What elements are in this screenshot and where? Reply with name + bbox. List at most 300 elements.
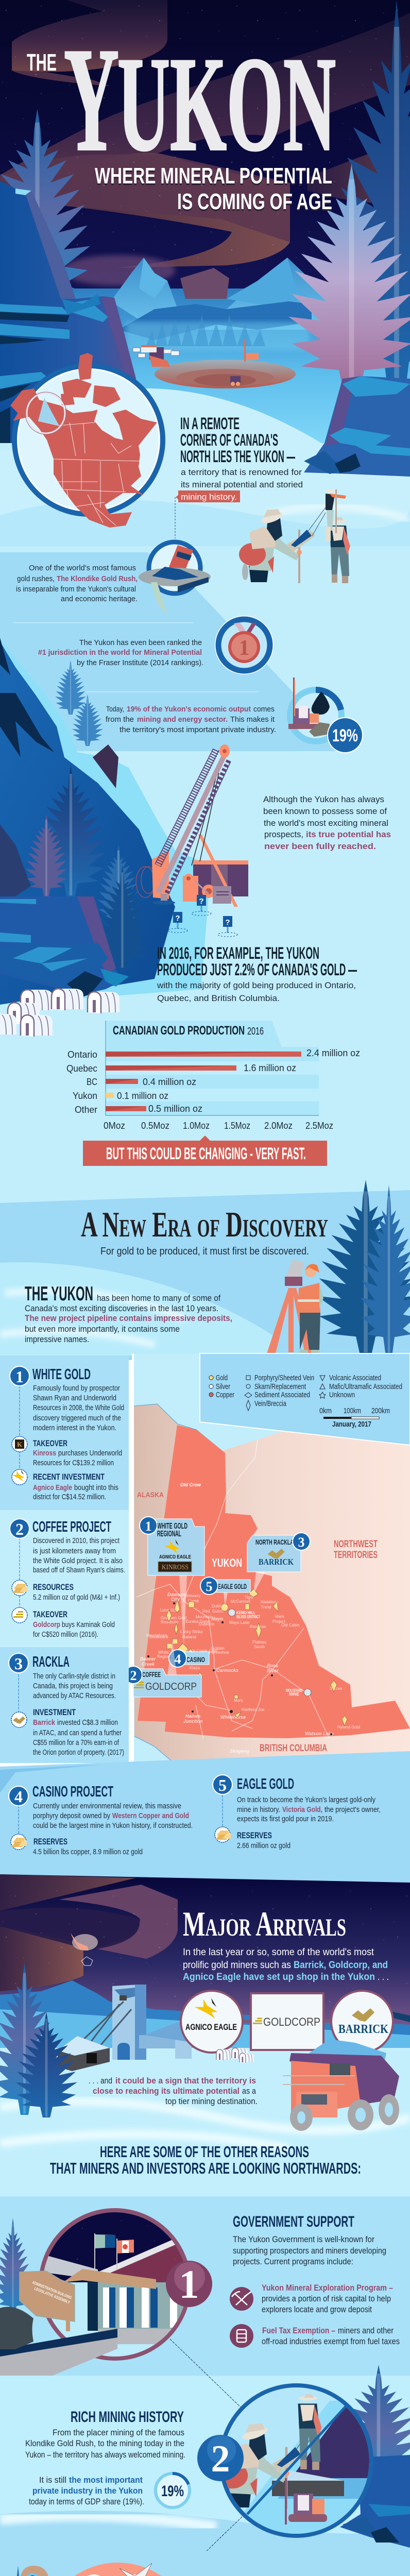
illustration: mining plant: [58, 1985, 216, 2071]
map label: Alaska: ALASKA: [137, 1490, 164, 1499]
panel 3: Rackla: The only Carlin-style district in: [33, 1672, 115, 1681]
callout: Eagle Gold: [200, 1577, 250, 1606]
text: rich mining history: From the placer mining of the famous: [53, 2428, 184, 2437]
text: true potential: [263, 794, 391, 851]
illustration: mining truck: [283, 2039, 399, 2131]
bar chart: Canadian gold production: CANADIAN GOLD PRODUCTION: [113, 1024, 245, 1038]
text: the Yukon intro: impressive names.: [25, 1334, 89, 1344]
panel 1: White Gold: bought into this: [74, 1483, 118, 1492]
rocks, tree and question signs: [0, 866, 237, 997]
map: Yukon discovery map: Dublin: [212, 1604, 224, 1608]
text: the Yukon intro: THE YUKON: [25, 1283, 93, 1305]
map legend panel: Volcanic Associated: [329, 1374, 381, 1382]
map legend panel: Porphyry/Sheeted Vein: [254, 1374, 314, 1382]
Eagle Gold: Victoria Gold,: [282, 1805, 322, 1814]
panel 2: Coffee Project: 2: [15, 1520, 24, 1538]
map: Yukon discovery map: Regional: [157, 1654, 174, 1659]
text: top tier destination: close to reaching its ultimate potential: [93, 2086, 240, 2096]
chart: 19 percent GDP ring: 19%: [161, 2483, 184, 2500]
map: Yukon discovery map: Mayo Lake: [229, 1620, 250, 1625]
map: Yukon discovery map: Tiger: [245, 1595, 254, 1600]
text: Klondike gold rush: and economic heritage.: [61, 595, 138, 603]
panel: diagonal darker band: [0, 552, 350, 751]
map: Yukon discovery map: Mars: [275, 1614, 284, 1619]
text: 19 percent economic output: mining and energy sector.: [137, 715, 228, 724]
bar chart: Canadian gold production: BC: [87, 1077, 97, 1087]
icon: dynamite and gold pan: [139, 541, 211, 616]
text: remote corner of Canada: mining history.: [181, 492, 237, 502]
Eagle Gold: the project's owner,: [324, 1805, 381, 1814]
map: Yukon discovery map: City: [171, 1597, 180, 1602]
map: Yukon discovery map: White: [158, 1650, 169, 1655]
bar chart: Canadian gold production: 2016: [247, 1026, 264, 1037]
map: Yukon discovery map: South: [254, 1645, 265, 1649]
map: Yukon discovery map: Carmacks: [216, 1668, 238, 1673]
map: Yukon discovery map: Gulch: [212, 1609, 223, 1614]
callout: Casino: [168, 1649, 209, 1668]
text: rich mining history: Yukon – the territory has always welcomed mining.: [25, 2450, 185, 2460]
text: remote corner of Canada: IN A REMOTE: [180, 414, 240, 433]
panel 1: White Gold: Kinross: [33, 1449, 56, 1458]
panel 1: White Gold: [0, 1355, 129, 1510]
callout: White Gold Regional: REGIONAL: [157, 1530, 181, 1538]
callout: North Rackla: NORTH RACKLA: [255, 1538, 294, 1546]
logos: major miners: [181, 1991, 393, 2053]
sign: administration building: [20, 2271, 75, 2331]
bar chart: Canadian gold production: 0.5Moz: [141, 1121, 169, 1131]
panel 3: Rackla: invested C$8.3 million: [57, 1718, 118, 1727]
panel 2: Coffee Project: Goldcorp: [33, 1620, 60, 1629]
map: Yukon discovery map: Haines: [185, 1714, 201, 1719]
title: The Yukon: THE: [27, 49, 57, 76]
text: 19 percent economic output: 19% of the Yukon's economic output: [127, 705, 251, 714]
tree: left hero spruce: [0, 109, 90, 289]
panel 3: Rackla: INVESTMENT: [33, 1707, 76, 1717]
left cliff rocks: [0, 181, 136, 453]
open pit mine with machines: [133, 340, 296, 388]
camp huts: [0, 989, 119, 1037]
panel 3: Rackla: Canada, this project is being: [33, 1682, 113, 1690]
map: Yukon discovery map: McConnell: [231, 1599, 250, 1604]
dashed connector: [175, 497, 292, 693]
panel 3: Rackla: Barrick: [33, 1718, 56, 1727]
trees: behind surveyor: [317, 1180, 410, 1354]
map: Yukon discovery map: Mountain: [196, 1615, 213, 1619]
text: top tier destination: it could be a sign that the territory is: [115, 2076, 256, 2086]
right cliff rocks: [304, 376, 410, 477]
program: Fuel Tax Exemption: Fuel Tax Exemption –: [262, 2326, 335, 2335]
map: Yukon discovery map: Old Cabin: [281, 1623, 300, 1628]
bar chart: Canadian gold production: 1.0Moz: [183, 1121, 210, 1131]
text: 2016 gold production: with the majority of gold being produced in Ontario,: [157, 980, 356, 990]
map legend panel: Vein/Breccia: [254, 1399, 286, 1408]
panel 1: White Gold: Agnico Eagle: [33, 1483, 72, 1492]
text: true potential: its true potential has: [306, 829, 391, 839]
illustration: mining history circle: [221, 2383, 373, 2538]
map: Yukon discovery map: Mayo: [211, 1616, 224, 1621]
map: Yukon discovery map: Moosehorn: [146, 1633, 167, 1638]
text: miners have set up shop: prolific gold miners such as: [183, 1960, 291, 1971]
subtitle: [95, 163, 332, 214]
panel 1: White Gold: modern interest in the Yukon.: [33, 1423, 116, 1432]
panel 1: White Gold: Resources in 2008, the White Gold: [33, 1403, 124, 1412]
logo: Goldcorp: [251, 1993, 323, 2050]
hero night sky background: [0, 0, 410, 304]
map: Yukon discovery map: Ross: [267, 1663, 278, 1668]
logo: Agnico Eagle: [181, 1991, 243, 2053]
illustration: prospectors: [239, 489, 350, 583]
subtitle: IS COMING OF AGE: [177, 189, 332, 214]
map: Yukon discovery map: KENO HILL: [236, 1611, 255, 1615]
map legend panel: Copper: [216, 1391, 234, 1399]
map: Yukon discovery map: Brewery: [185, 1594, 200, 1598]
bar chart: Canadian gold production: 1.6 million oz: [244, 1063, 296, 1073]
map legend panel: Unknown: [329, 1391, 355, 1399]
text: remote corner of Canada: [176, 414, 303, 502]
text: true potential: never been fully reached.: [264, 841, 376, 851]
panel 2: Coffee Project: based off of Shawn Ryan's claims.: [33, 1566, 125, 1574]
callout: North Rackla: BARRICK: [259, 1557, 294, 1567]
text: Klondike gold rush: The Klondike Gold Rush,: [57, 574, 138, 583]
text: top tier destination: as a: [242, 2086, 256, 2096]
map: Yukon discovery map: Ballarat: [182, 1635, 197, 1639]
callout: White Gold Regional: [139, 1516, 204, 1647]
Eagle Gold: 2.66 million oz gold: [237, 1841, 291, 1850]
text: rich mining history: private industry in the Yukon: [32, 2486, 143, 2496]
map: Yukon discovery map: Hartless Joe: [242, 1707, 265, 1712]
map: Yukon discovery map: Dubloon: [199, 1622, 214, 1626]
text: ranked number one: #1 jurisdiction in the world for Mineral Potential: [38, 648, 202, 657]
illustration: first nations emblems circle: [41, 2563, 195, 2576]
map: Yukon discovery map: Red: [202, 1609, 210, 1614]
panel 1: White Gold: RECENT INVESTMENT: [33, 1472, 105, 1482]
Eagle Gold: RESERVES: [237, 1831, 272, 1840]
program: Yukon Mineral Exploration Program: [230, 2283, 393, 2314]
Casino Project: Currently under environmental review, this massive: [33, 1802, 181, 1810]
panel 2: Coffee Project: TAKEOVER: [33, 1609, 67, 1619]
Eagle Gold: On track to become the Yukon's largest gold-only: [237, 1795, 375, 1804]
callout: Eagle Gold: 5: [206, 1579, 212, 1594]
map: Yukon discovery map: Creek: [142, 1662, 155, 1667]
text: the Yukon intro: but even more importantly, it contains some: [25, 1324, 180, 1334]
panel 3: Rackla: C$55 million for a 70% earn-in of: [33, 1738, 119, 1747]
text: Klondike gold rush: One of the world's most famous: [29, 564, 136, 572]
map label: Yukon: YUKON: [212, 1556, 242, 1569]
icon: medal: 1: [239, 636, 249, 660]
logo: Barrick: [331, 1991, 393, 2053]
Casino Project: 4: [14, 1787, 23, 1806]
panel 2: Coffee Project: for C$520 million (2016).: [33, 1630, 98, 1639]
map legend panel: 200km: [371, 1406, 390, 1415]
callout: White Gold Regional: WHITE GOLD: [157, 1522, 187, 1531]
panel 3: Rackla: the Orion portion of property. (2017): [33, 1748, 124, 1757]
illustration: government building circle: [0, 2208, 191, 2376]
tree: left of first nations: [16, 2566, 20, 2576]
map: Yukon discovery map: Nadaleen: [261, 1600, 278, 1604]
map legend panel: 100km: [344, 1406, 361, 1415]
text: the Yukon intro: [25, 1283, 232, 1344]
text: Klondike gold rush: is inseparable from the Yukon's cultural: [16, 585, 136, 594]
panel 1: White Gold: 1: [15, 1367, 24, 1386]
map label: Northwest Territories: [334, 1539, 378, 1561]
panel 2: Coffee Project: Discovered in 2010, this project: [33, 1536, 120, 1545]
text: ranked number one: by the Fraser Institute (2014 rankings).: [77, 658, 203, 667]
text: the Yukon intro: has been home to many of some of: [97, 1293, 220, 1303]
panel 1: White Gold: Famously found by prospector: [33, 1384, 120, 1393]
panel 2: Coffee Project: is just kilometers away from: [33, 1547, 116, 1555]
text: rich mining history: today in terms of GDP share (19%).: [29, 2497, 144, 2506]
map: Yukon discovery map: Whitehorse: [220, 1715, 246, 1720]
trees: arrivals left: [0, 1963, 77, 2117]
panel 1: White Gold: discovery triggered much of the: [33, 1414, 121, 1422]
callout: Casino: 4: [174, 1652, 181, 1667]
map label: Northwest Territories: NORTHWEST: [334, 1539, 378, 1550]
callout: changing very fast: [83, 1136, 327, 1166]
Casino Project: Western Copper and Gold: [112, 1811, 189, 1820]
text: miners have set up shop: In the last year or so, some of the world's most: [183, 1947, 374, 1958]
text: subheading: For gold to be produced, it must first be discovered.: [100, 1246, 309, 1257]
text: 19 percent economic output: from the: [106, 715, 134, 724]
text: Klondike gold rush: gold rushes,: [17, 574, 55, 583]
badge: number 1: [166, 2261, 212, 2307]
callout: North Rackla: 3: [298, 1535, 305, 1550]
bar chart: Canadian gold production: 0.1 million oz: [117, 1091, 168, 1101]
map: Yukon discovery map: Mars: [234, 1698, 243, 1703]
panel: snow base: [0, 388, 410, 1206]
illustration: drill rig: [136, 744, 248, 907]
map: Yukon discovery map: Skagway: [230, 1749, 250, 1754]
text: top tier destination: . . . and: [89, 2076, 112, 2086]
panel: snow lower arrivals: [0, 2048, 410, 2196]
map: Yukon discovery map: Grabben Gold: [161, 1616, 186, 1620]
text: rich mining history: RICH MINING HISTORY: [71, 2409, 184, 2426]
map: Yukon discovery map: Dawson: [167, 1592, 185, 1597]
program: Fuel Tax Exemption: [230, 2324, 400, 2348]
panel 3: Rackla: 3: [14, 1654, 23, 1673]
text: 19 percent economic output: This makes it: [230, 715, 275, 724]
map legend panel: 0km: [319, 1406, 332, 1415]
chart: 19 percent donut: [288, 677, 363, 753]
sign: administration building: LEGISLATIVE ASSEMBLY: [33, 2286, 71, 2305]
chart: 19 percent GDP ring: [156, 2473, 190, 2507]
panel 2: Coffee Project: COFFEE PROJECT: [32, 1519, 111, 1535]
callout: Eagle Gold: EAGLE GOLD: [218, 1582, 247, 1590]
illustration: mountain and trees: [0, 638, 211, 1005]
panel 1: White Gold: district for C$14.52 million.: [33, 1493, 106, 1501]
map legend panel: Sediment Associated: [254, 1391, 310, 1399]
map: Yukon discovery map: MINE: [289, 1692, 300, 1697]
text: miners have set up shop: . . .: [378, 1972, 389, 1982]
text: true potential: prospects,: [264, 829, 303, 839]
panel 2: Coffee Project: 5.2 million oz of gold (M&I + Inf.): [33, 1593, 120, 1602]
sign: administration building: ADMINISTRATION BUILDING: [31, 2280, 73, 2300]
Casino Project: porphyry deposit owned by: [33, 1811, 110, 1820]
panel: rich mining history background: [0, 2376, 410, 2551]
Eagle Gold: 5: [218, 1776, 227, 1794]
panel 3: Rackla: advanced by ATAC Resources.: [33, 1691, 116, 1700]
text: 19 percent economic output: Today,: [106, 705, 124, 714]
panel 2: Coffee Project: RESOURCES: [33, 1582, 74, 1592]
bar chart: Canadian gold production: Other: [75, 1105, 97, 1115]
map: Yukon discovery map: Plateau: [252, 1640, 266, 1645]
text: miners have set up shop: Agnico Eagle have set up shop in the Yukon: [183, 1972, 375, 1982]
badge: number 2: 2: [211, 2438, 230, 2480]
text: government support: supporting prospectors and miners developing: [233, 2246, 386, 2256]
text: government support: projects. Current programs include:: [233, 2257, 353, 2266]
panel 2: Coffee Project: buys Kaminak Gold: [62, 1620, 115, 1629]
map: Yukon discovery map: Trend: [261, 1605, 271, 1609]
logo: Barrick: BARRICK: [338, 2023, 388, 2036]
Eagle Gold: EAGLE GOLD: [237, 1776, 294, 1792]
bar chart: Canadian gold production: 0Moz: [104, 1121, 125, 1131]
text: government support: The Yukon Government is well-known for: [233, 2234, 374, 2244]
panel 1: White Gold: WHITE GOLD: [32, 1366, 91, 1383]
map: Yukon discovery map: [132, 1354, 410, 1762]
map: Yukon discovery map: Hyland Gold: [337, 1725, 360, 1730]
text: miners have set up shop: Barrick, Goldcorp, and: [294, 1960, 388, 1971]
illustration: totem pole: [21, 2566, 49, 2576]
bar chart: Canadian gold production: 2.4 million oz: [306, 1048, 360, 1058]
text: 19 percent economic output: [81, 691, 276, 734]
text: rich mining history: Klondike Gold Rush, to the mining today in the: [25, 2438, 184, 2448]
callout: Coffee: 2: [130, 1668, 137, 1683]
bar chart: Canadian gold production: 0.4 million oz: [143, 1077, 196, 1087]
panel 1: White Gold: K: [17, 1440, 23, 1448]
Casino Project: [8, 1784, 193, 1856]
map label: Old Crow: Old Crow: [180, 1482, 201, 1487]
map legend panel: January, 2017: [332, 1420, 371, 1429]
callout: North Rackla: [247, 1532, 311, 1594]
title: The Yukon: [27, 18, 336, 182]
callout: White Gold Regional: KINROSS: [162, 1564, 189, 1571]
badge: number 1: 1: [179, 2262, 199, 2307]
text: top tier destination: top tier mining destination.: [165, 2096, 258, 2106]
program: Yukon Mineral Exploration Program: provides a portion of risk capital to help: [262, 2294, 391, 2303]
map legend panel: Silver: [216, 1382, 230, 1391]
Eagle Gold: [212, 1774, 381, 1850]
map: Yukon discovery map: Junction: [183, 1719, 203, 1724]
map: Yukon discovery map: Project: [272, 1619, 286, 1624]
chart: 19 percent donut: 19%: [332, 726, 358, 745]
map legend panel: [200, 1353, 410, 1445]
bar chart: Canadian gold production: 1.5Moz: [224, 1121, 250, 1131]
panel 1: White Gold: Shawn Ryan and Underworld: [33, 1394, 116, 1402]
map: Yukon discovery map: Horseshoe: [209, 1650, 229, 1655]
emblems: [47, 2574, 182, 2576]
bar chart: Canadian gold production: Quebec: [66, 1063, 97, 1074]
bar chart: Canadian gold production: 0.5 million oz: [148, 1104, 202, 1114]
Casino Project: could be the largest mine in Yukon history, if constructed.: [33, 1821, 193, 1830]
text: 2016 gold production: [157, 944, 357, 1003]
illustration: surveyor: [267, 1260, 323, 1353]
text: remote corner of Canada: CORNER OF CANADA'S: [180, 431, 278, 449]
tree: right dark spruce: [338, 0, 410, 379]
text: true potential: the world's most exciting mineral: [264, 818, 388, 828]
panel: government support background: [0, 2196, 410, 2376]
map: Yukon discovery map: Lone Star: [160, 1608, 178, 1613]
panel 3: Rackla: RACKLA: [32, 1654, 70, 1670]
callout: Coffee: GOLDCORP: [145, 1681, 197, 1692]
panel: Casino and Eagle Gold: [0, 1751, 410, 1886]
map: Yukon discovery map: 3 Aces: [330, 1686, 342, 1691]
icon: medal: [215, 616, 274, 674]
valley fog and mountains: [0, 258, 410, 453]
panel: first nations background: [0, 2551, 410, 2576]
callout: Coffee: COFFEE: [142, 1670, 161, 1679]
bar chart: Canadian gold production: 2.0Moz: [264, 1121, 293, 1131]
map: Yukon discovery map: Rosebute: [161, 1620, 179, 1624]
map: Yukon discovery map: Boulevard: [149, 1635, 168, 1639]
map: Yukon discovery map: WOLVERINE: [286, 1688, 302, 1693]
callout: White Gold Regional: AGNICO EAGLE: [159, 1554, 191, 1560]
text: remote corner of Canada: a territory that is renowned for: [181, 467, 302, 477]
text: rich mining history: the most important: [69, 2475, 143, 2485]
text: remote corner of Canada: its mineral potential and storied: [181, 480, 303, 489]
Eagle Gold: mine in history.: [237, 1805, 280, 1814]
map: Yukon discovery map: SILVER DISTRICT: [236, 1615, 260, 1619]
panel 1: White Gold: purchases Underworld: [58, 1449, 122, 1458]
text: the Yukon intro: The new project pipeline contains impressive deposits,: [25, 1313, 232, 1323]
Casino Project: CASINO PROJECT: [32, 1784, 113, 1800]
text: ranked number one: The Yukon has even been ranked the: [79, 638, 202, 647]
Casino Project: RESERVES: [33, 1837, 67, 1846]
text: remote corner of Canada: NORTH LIES THE YUKON —: [180, 447, 295, 466]
title: The Yukon: Y: [64, 18, 119, 182]
callout: Coffee: [124, 1641, 201, 1697]
text: Klondike gold rush: [16, 564, 138, 603]
text: ranked number one: [13, 622, 203, 667]
bar chart: Canadian gold production: Yukon: [73, 1091, 97, 1101]
panel 1: White Gold: Resources for C$139.2 million: [33, 1459, 114, 1467]
map: Yukon discovery map: Nucle Creek Gold: [185, 1649, 217, 1653]
text: miners have set up shop: [183, 1947, 389, 1982]
logo: Agnico Eagle: AGNICO EAGLE: [185, 2022, 237, 2032]
program: Yukon Mineral Exploration Program: explorers locate and grow deposit: [262, 2304, 372, 2314]
text: top tier destination: [89, 2076, 258, 2106]
program: Fuel Tax Exemption: miners and other: [338, 2326, 394, 2335]
panel 3: Rackla: [0, 1647, 129, 1763]
text: 19 percent economic output: comes: [253, 705, 275, 714]
panel 1: White Gold: TAKEOVER: [33, 1438, 67, 1448]
map: Yukon discovery map: Klaza: [190, 1666, 200, 1670]
text: true potential: been known to possess some of: [263, 806, 387, 816]
panel: major arrivals night sky: [0, 1874, 410, 2061]
bar chart: Canadian gold production: [66, 1021, 360, 1131]
map label: Northwest Territories: TERRITORIES: [334, 1550, 378, 1561]
map: Yukon discovery map: Lucky Strike: [180, 1630, 203, 1634]
callout: Casino: CASINO: [186, 1655, 205, 1664]
panel: new era background: [0, 1190, 410, 1360]
connector lines: [165, 2339, 242, 2576]
illustration: helicopter: [71, 1933, 98, 1965]
badge: number 2: [197, 2435, 244, 2481]
panel 2: Coffee Project: [0, 1510, 129, 1647]
tree: right pink spruce: [288, 164, 410, 382]
map circle: North America: [10, 353, 165, 528]
text: 2016 gold production: Quebec, and British Columbia.: [157, 993, 280, 1003]
bar chart: Canadian gold production: 2.5Moz: [305, 1121, 333, 1131]
text: 19 percent economic output: the territory's most important private industry.: [119, 725, 276, 734]
text: rich mining history: It is still: [39, 2475, 66, 2485]
logo: Goldcorp: GOLDCORP: [263, 2015, 320, 2028]
callout: White Gold Regional: 1: [145, 1519, 151, 1534]
North America landmass: [10, 353, 157, 528]
panel 3: Rackla: in ATAC, and can spend a further: [33, 1728, 122, 1737]
panel 2: Coffee Project: the White Gold project. It is also: [33, 1556, 123, 1565]
illustration: huts near logos: [216, 2048, 254, 2063]
trees and rocks: right of circle 2: [335, 2365, 410, 2548]
map legend panel: Skarn/Replacement: [254, 1382, 306, 1391]
